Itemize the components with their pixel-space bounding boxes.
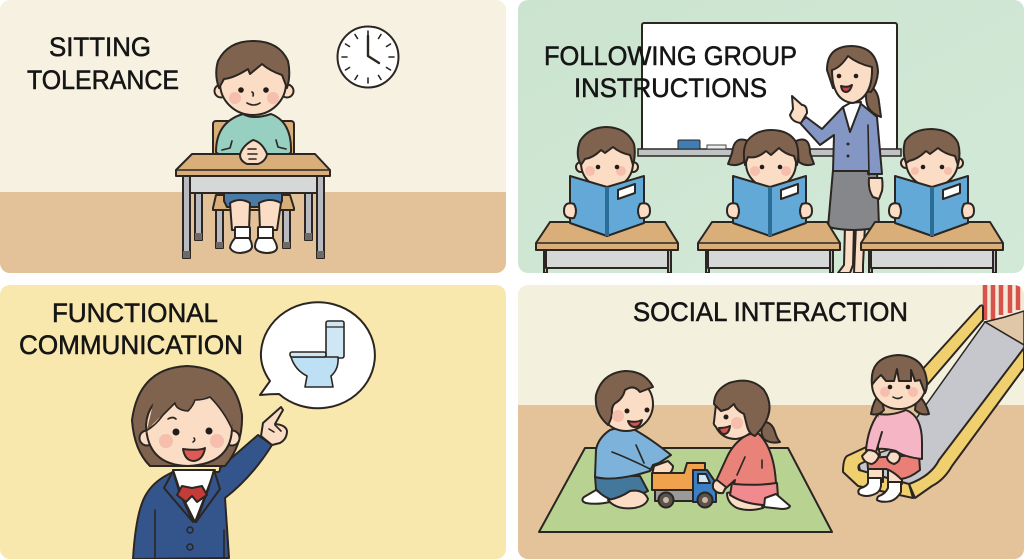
red bow	[177, 486, 207, 502]
sweater and arm	[716, 433, 776, 489]
girl playing	[713, 381, 790, 510]
teacher head	[827, 46, 878, 92]
skirt	[867, 455, 920, 479]
sock	[764, 494, 790, 509]
lapels	[164, 470, 220, 522]
teacher hands	[790, 96, 807, 123]
teacher	[790, 46, 882, 273]
desktop	[176, 154, 330, 176]
shorts	[595, 476, 648, 503]
slide deck	[985, 311, 1024, 345]
toy dump truck	[652, 463, 716, 508]
icon: toilet	[290, 321, 344, 387]
hair back and head	[132, 366, 242, 466]
boy sweater	[216, 114, 291, 156]
panel: functional communication	[0, 285, 506, 559]
whiteboard	[638, 23, 901, 156]
student: girl centre	[727, 130, 814, 236]
teacher legs	[838, 225, 865, 273]
student desk left	[536, 222, 678, 273]
heading: following group instructions: FOLLOWING GROUP	[544, 41, 797, 71]
head	[714, 395, 759, 439]
heading: functional communication	[20, 303, 242, 354]
heading: functional communication: FUNCTIONAL	[52, 298, 218, 328]
heading: sitting tolerance	[27, 37, 178, 90]
lower rail	[909, 348, 1024, 498]
pointing hand	[261, 407, 287, 445]
chair seat and legs	[213, 195, 294, 248]
slide	[843, 285, 1024, 498]
girl pointing up	[132, 366, 287, 559]
front desk legs	[183, 176, 324, 258]
student desk right	[861, 222, 1003, 273]
boy legs and shoes	[230, 200, 281, 253]
boy playing	[582, 371, 673, 508]
heading: functional communication: COMMUNICATION	[19, 330, 243, 360]
seated girl on slide	[858, 355, 929, 502]
slide foot	[843, 442, 913, 498]
student desk centre	[698, 222, 840, 273]
heading: following group instructions: INSTRUCTIONS	[574, 73, 767, 103]
hand	[713, 480, 726, 493]
icon: wall clock	[338, 26, 398, 88]
panel: social interaction	[518, 285, 1024, 559]
heading: following group instructions	[546, 46, 796, 98]
ponytail	[762, 422, 780, 443]
chair back	[212, 120, 295, 153]
hands	[652, 461, 673, 478]
shoe	[582, 490, 610, 504]
striped railing	[982, 285, 1024, 320]
grey desk apron	[188, 176, 318, 193]
back desk legs	[195, 190, 312, 240]
upper rail	[920, 305, 983, 384]
panel: sitting tolerance	[0, 0, 506, 273]
play mat	[539, 448, 832, 532]
speech bubble with toilet icon	[260, 302, 375, 408]
buttons	[187, 527, 193, 550]
head	[599, 377, 653, 431]
legs and socks	[868, 465, 902, 484]
girl hands	[862, 450, 900, 464]
panel: following group instructions	[518, 0, 1024, 273]
girl head	[872, 359, 926, 409]
heading: sitting tolerance: TOLERANCE	[27, 65, 179, 95]
sweater and arms	[595, 428, 671, 479]
heading: social interaction: SOCIAL INTERACTION	[633, 297, 908, 327]
knee	[608, 491, 648, 508]
student: boy left	[564, 127, 650, 236]
shirt	[173, 470, 215, 522]
heading: sitting tolerance: SITTING	[49, 32, 151, 62]
slide surface	[858, 322, 1024, 489]
pink sweater	[878, 410, 922, 459]
skirt and legs	[727, 491, 763, 510]
boy shorts	[223, 194, 283, 208]
blazer and raised arm	[133, 435, 272, 559]
illustration: seated boy at desk	[176, 41, 330, 258]
boy head	[214, 41, 294, 115]
ponytail	[866, 84, 881, 117]
student: boy right	[889, 129, 974, 236]
jacket with pointing arm	[800, 103, 882, 174]
clasped hands	[240, 140, 267, 164]
skirt	[828, 170, 879, 230]
